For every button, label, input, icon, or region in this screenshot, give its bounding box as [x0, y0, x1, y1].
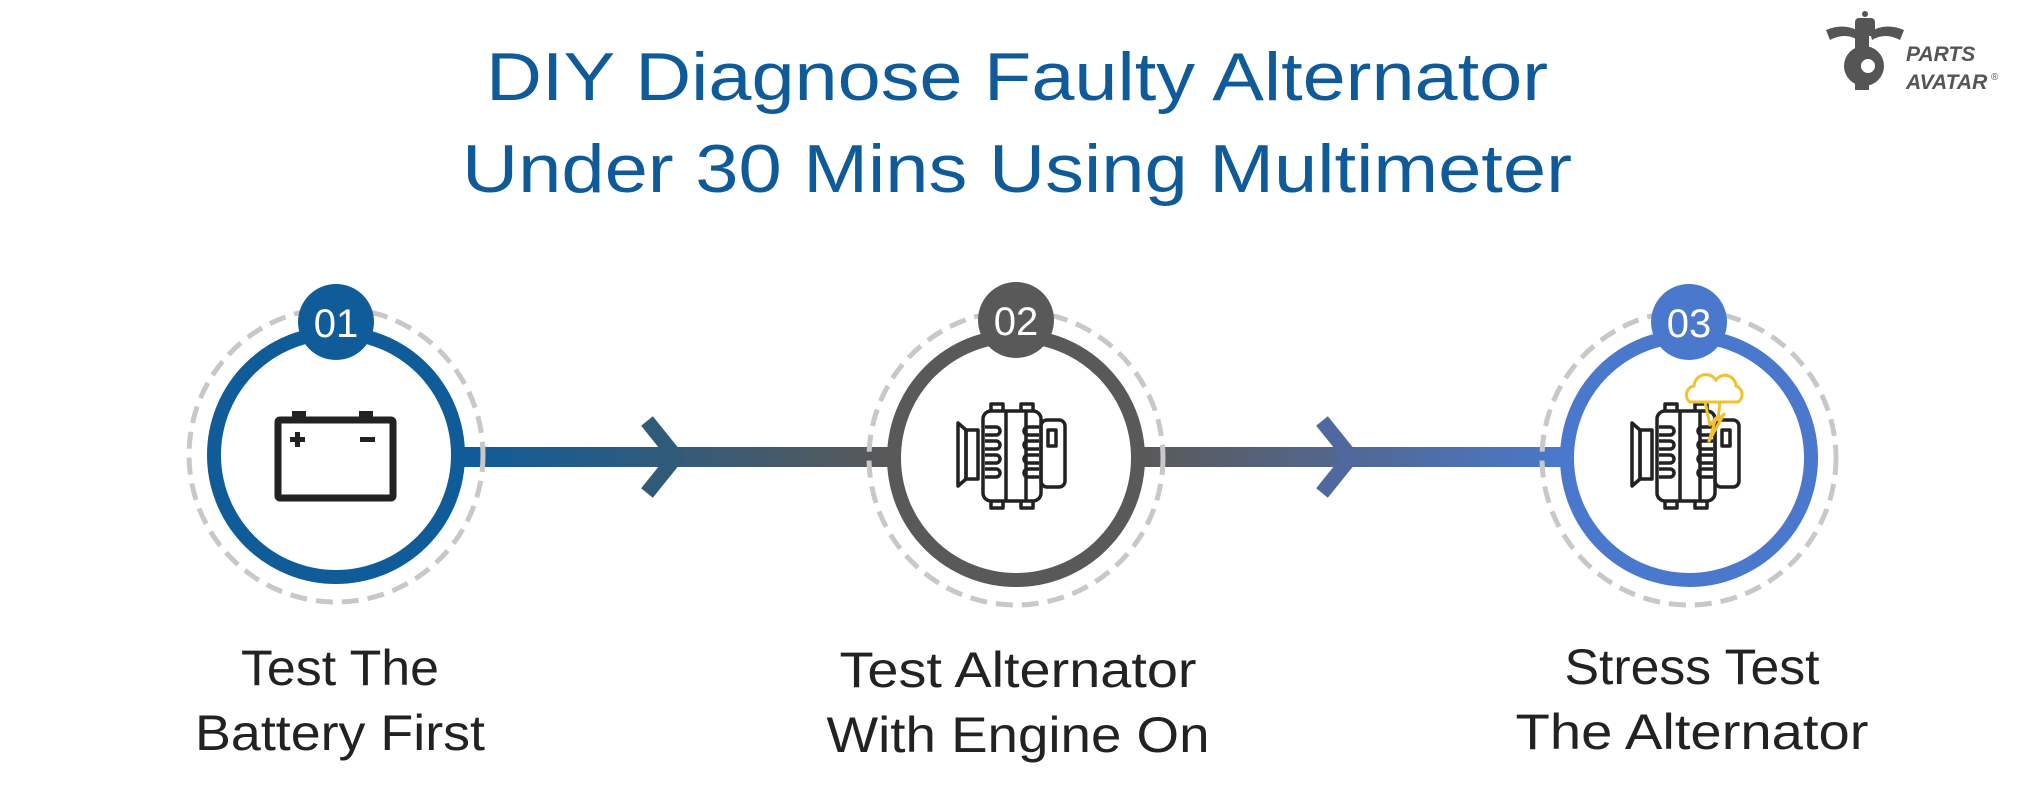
label 3: Stress Test — [1564, 639, 1820, 695]
connector bar 1 — [460, 421, 890, 493]
label 1: Battery First — [195, 705, 485, 761]
label 1: Test The — [241, 640, 439, 696]
step 1 — [189, 284, 483, 602]
arrow 1 — [647, 421, 676, 493]
step 2 — [869, 282, 1163, 605]
label 2: With Engine On — [826, 707, 1210, 763]
label 1 — [195, 640, 485, 761]
badge 02 — [978, 282, 1054, 358]
badge 03: 03 — [1667, 302, 1711, 346]
arrow 2 — [1322, 421, 1351, 493]
badge 02: 02 — [994, 300, 1038, 344]
title: DIY Diagnose Faulty Alternator — [486, 39, 1548, 115]
connector bar 2 — [1142, 421, 1567, 493]
step 3 — [1542, 284, 1836, 605]
icon: alternator with lightning — [1632, 375, 1742, 508]
logo: Parts Avatar: ® — [1991, 72, 1999, 83]
logo: Parts Avatar: AVATAR — [1905, 71, 1988, 94]
label 3: The Alternator — [1516, 704, 1868, 760]
label 2: Test Alternator — [840, 642, 1196, 698]
logo: Parts Avatar: PARTS — [1906, 43, 1975, 66]
logo: Parts Avatar — [1826, 11, 1999, 94]
label 2 — [826, 642, 1210, 763]
label 3 — [1516, 639, 1868, 760]
title: Under 30 Mins Using Multimeter — [462, 131, 1572, 207]
badge 03 — [1651, 284, 1727, 360]
badge 01 — [298, 284, 374, 360]
title — [462, 39, 1572, 207]
icon: alternator — [958, 404, 1065, 508]
icon: battery — [278, 411, 393, 498]
badge 01: 01 — [314, 302, 358, 346]
